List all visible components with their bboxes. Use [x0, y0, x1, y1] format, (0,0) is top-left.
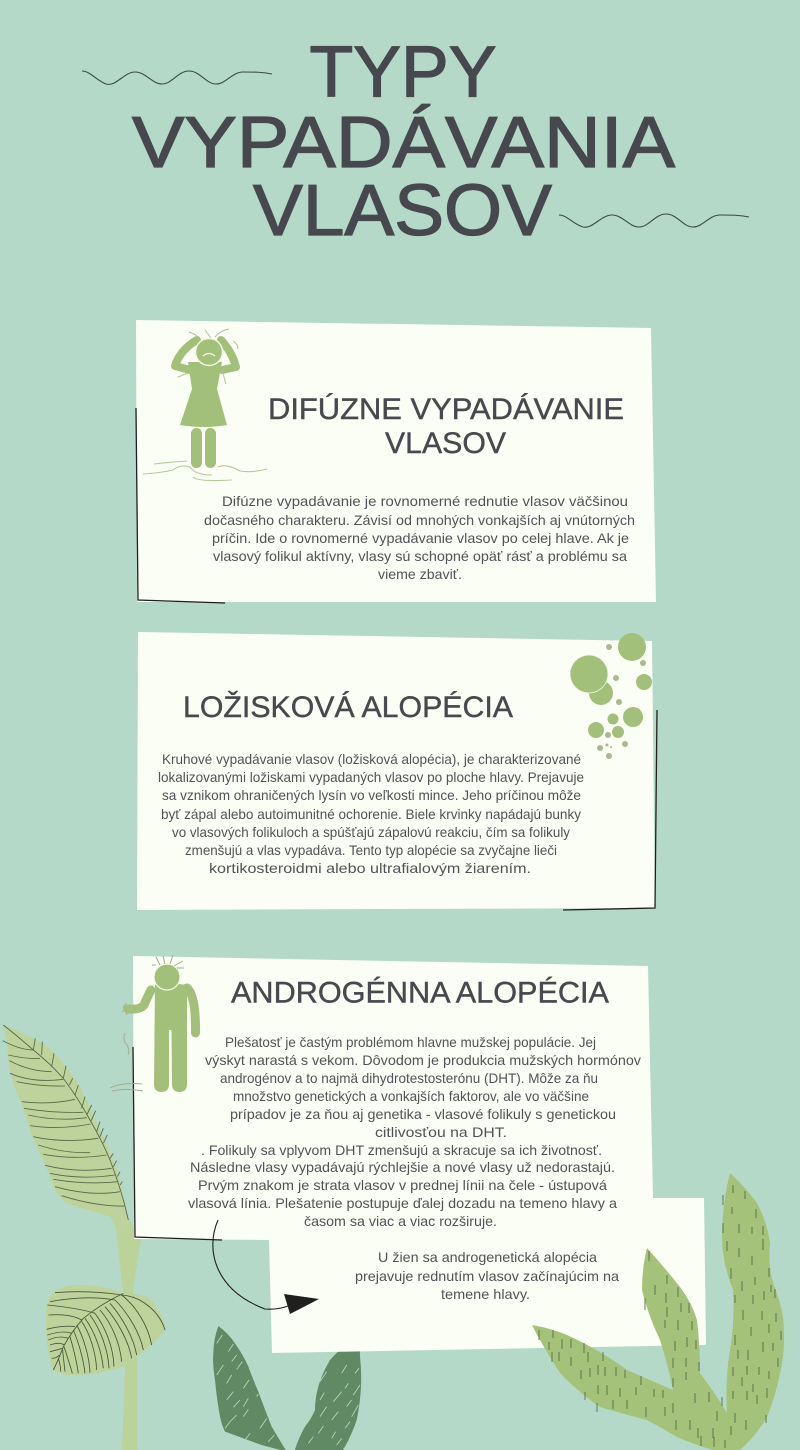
icon: bubbles: [570, 633, 652, 759]
text block: vlasová línia. Plešatenie postupuje ďalej dozadu na temeno hlavy a: [188, 1196, 617, 1211]
text block: sa vznikom ohraničených lysín vo veľkosti mince. Jeho príčinou môže: [162, 788, 581, 803]
text block: vieme zbaviť.: [378, 567, 462, 582]
heading: LOŽISKOVÁ ALOPÉCIA: [183, 691, 513, 724]
decorative squiggle: top left: [82, 71, 272, 84]
text block: Následne vlasy vypadávajú rýchlejšie a nové vlasy už nedorastajú.: [190, 1160, 615, 1175]
plant: green leaves, bottom right: [532, 1173, 784, 1450]
text block: byť zápal alebo autoimunitné ochorenie. Biele krvinky napádajú bunky: [161, 807, 581, 822]
text block: príčin. Ide o rovnomerné vypadávanie vlasov po celej hlave. Ak je: [212, 531, 629, 546]
title: VLASOV: [253, 170, 553, 251]
icon: balding man: [110, 955, 196, 1092]
text block: množstvo genetických a vonkajších faktorov, ale vo väčšine: [233, 1089, 589, 1104]
text block: kortikosteroidmi alebo ultrafialovým žiarením.: [209, 861, 531, 876]
heading: VLASOV: [385, 427, 506, 460]
text block: vlasový folikul aktívny, vlasy sú schopné opäť rásť a problému sa: [213, 549, 627, 564]
text block: zmenšujú a vlas vypadáva. Tento typ alopécie sa zvyčajne lieči: [185, 843, 557, 858]
text block: [158, 752, 584, 876]
text block: Plešatosť je častým problémom hlavne mužskej populácie. Jej: [225, 1035, 596, 1050]
heading: DIFÚZNE VYPADÁVANIE: [268, 393, 624, 426]
text block: women: [355, 1250, 619, 1302]
text block: [188, 1035, 641, 1229]
panel: androgenna alopecia: [110, 955, 706, 1353]
panel: loziskova alopecia: [137, 632, 657, 910]
title: VYPADÁVANIA: [132, 102, 676, 183]
text block: [204, 494, 635, 582]
text block: androgénov a to najmä dihydrotestosterónu (DHT). Môže za ňu: [220, 1071, 598, 1086]
text block: women: U žien sa androgenetická alopécia: [378, 1250, 597, 1265]
icon: distressed woman: [143, 329, 267, 481]
plant: dark leaves, bottom centre: [213, 1326, 361, 1450]
title: [132, 32, 676, 251]
text block: lokalizovanými ložiskami vypadaných vlasov po ploche hlavy. Prejavuje: [158, 770, 584, 785]
text block: Prvým znakom je strata vlasov v prednej línii na čele - ústupová: [198, 1178, 607, 1193]
title: TYPY: [310, 32, 496, 112]
decorative squiggle: bottom right: [559, 214, 749, 227]
text block: Difúzne vypadávanie je rovnomerné rednutie vlasov väčšinou: [222, 494, 628, 509]
arrow: [213, 1220, 319, 1314]
text block: dočasného charakteru. Závisí od mnohých vonkajších aj vnútorných: [204, 513, 635, 528]
text block: časom sa viac a viac rozširuje.: [304, 1214, 497, 1229]
heading: ANDROGÉNNA ALOPÉCIA: [231, 976, 609, 1010]
text block: women: temene hlavy.: [441, 1287, 530, 1302]
text block: vo vlasových folikuloch a spúšťajú zápalovú reakciu, čím sa folikuly: [172, 825, 570, 840]
text block: women: prejavuje rednutím vlasov začínajúcim na: [355, 1269, 619, 1284]
text block: citlivosťou na DHT.: [375, 1125, 507, 1140]
text block: prípadov je za ňou aj genetika - vlasové folikuly s genetickou: [230, 1107, 616, 1122]
heading: [268, 393, 624, 460]
text block: . Folikuly sa vplyvom DHT zmenšujú a skracuje sa ich životnosť.: [201, 1143, 602, 1158]
panel: difuzne vypadavanie: [136, 320, 656, 603]
text block: Kruhové vypadávanie vlasov (ložisková alopécia), je charakterizované: [162, 752, 581, 767]
text block: výskyt narastá s vekom. Dôvodom je produkcia mužských hormónov: [205, 1053, 641, 1068]
plant: pale leaves and stem, lower left: [3, 1025, 165, 1450]
